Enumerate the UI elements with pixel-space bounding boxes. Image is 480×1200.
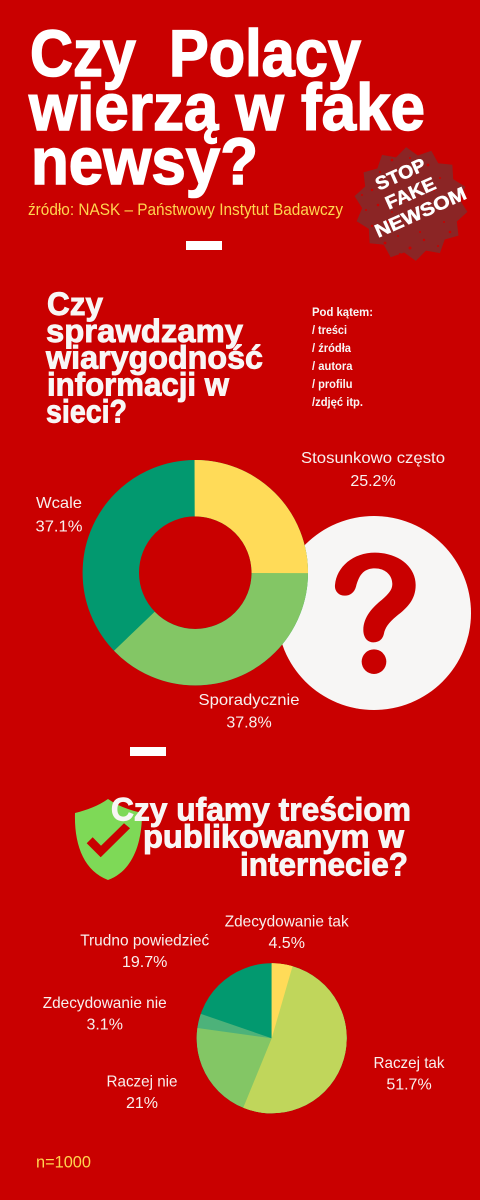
- pie labels: [43, 914, 445, 1112]
- heading: trust in online content: [111, 792, 411, 882]
- pie labels: 51.7%: [386, 1076, 432, 1094]
- donut labels: 25.2%: [350, 473, 396, 490]
- donut labels: Sporadycznie: [198, 692, 300, 709]
- icon: question mark: [277, 516, 471, 710]
- heading: checking credibility: sprawdzamy: [46, 313, 243, 349]
- stamp: stop fake newsom: STOP: [372, 154, 429, 194]
- pie labels: Raczej nie: [106, 1074, 178, 1090]
- text block: aspects checked: [312, 305, 373, 409]
- source line: źródło: NASK – Państwowy Instytut Badawczy: [28, 200, 343, 219]
- pie labels: 21%: [126, 1095, 158, 1112]
- pie labels: Raczej tak: [374, 1055, 445, 1072]
- donut labels: Stosunkowo często: [301, 450, 445, 467]
- title: wierzą w fake: [28, 70, 425, 144]
- heading: trust in online content: internecie?: [240, 846, 408, 882]
- heading: checking credibility: wiarygodność: [45, 340, 263, 376]
- donut labels: 37.8%: [226, 714, 272, 732]
- pie chart: [234, 1001, 309, 1076]
- text block: aspects checked: /zdjęć itp.: [312, 395, 363, 409]
- pie labels: Zdecydowanie nie: [43, 995, 167, 1012]
- heading: checking credibility: [45, 286, 263, 430]
- heading: checking credibility: Czy: [47, 286, 103, 322]
- stamp: stop fake newsom: [347, 141, 475, 267]
- pie labels: Trudno powiedzieć: [80, 932, 209, 950]
- pie labels: Zdecydowanie tak: [225, 914, 350, 930]
- text block: aspects checked: / profilu: [312, 377, 352, 391]
- heading: checking credibility: informacji w: [47, 366, 229, 402]
- pie labels: 4.5%: [268, 935, 305, 952]
- title: [28, 16, 425, 198]
- donut chart: [111, 488, 280, 657]
- text block: aspects checked: / źródła: [312, 341, 351, 355]
- donut labels: [36, 450, 445, 732]
- text block: aspects checked: / autora: [312, 359, 353, 373]
- heading: trust in online content: publikowanym w: [143, 818, 404, 854]
- donut labels: 37.1%: [36, 518, 82, 536]
- text block: aspects checked: Pod kątem:: [312, 305, 373, 319]
- donut labels: Wcale: [36, 495, 82, 512]
- sample size note: n=1000: [36, 1154, 91, 1172]
- heading: checking credibility: sieci?: [46, 394, 127, 430]
- title: Czy Polacy: [30, 16, 361, 90]
- heading: trust in online content: Czy ufamy treściom: [111, 792, 411, 828]
- pie labels: 19.7%: [122, 954, 167, 971]
- icon: shield with check: [75, 799, 142, 880]
- title: newsy?: [31, 124, 258, 198]
- pie labels: 3.1%: [86, 1016, 123, 1034]
- text block: aspects checked: / treści: [312, 323, 347, 337]
- stamp: stop fake newsom: NEWSOM: [371, 183, 469, 242]
- stamp: stop fake newsom: FAKE: [382, 173, 439, 213]
